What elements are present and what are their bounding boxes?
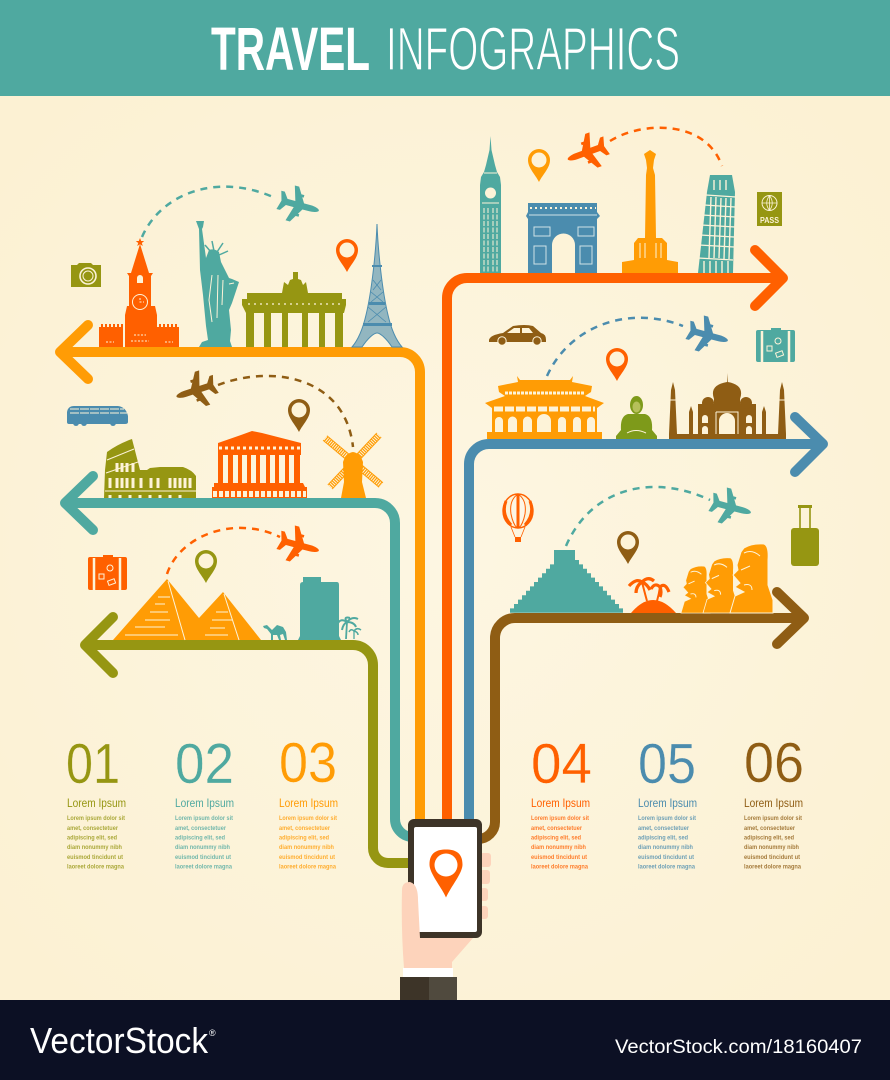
column 04 xyxy=(531,732,592,870)
column 01: adipiscing elit, sed xyxy=(67,834,117,842)
column 03: diam nonummy nibh xyxy=(279,844,334,851)
icon: palm trees xyxy=(338,618,361,639)
icon: map pin olive xyxy=(195,550,217,583)
column 05: Lorem ipsum dolor sit xyxy=(638,815,697,822)
icon: camera xyxy=(71,263,101,287)
landmark: modern building xyxy=(298,577,341,640)
column 06 xyxy=(744,731,804,870)
column 01: amet, consectetuer xyxy=(67,825,118,832)
column 03: amet, consectetuer xyxy=(279,825,330,832)
column 05: Lorem Ipsum xyxy=(638,798,697,810)
column 06: Lorem Ipsum xyxy=(744,798,803,810)
route line 3: olive arrow left xyxy=(85,617,420,863)
landmark: Mayan pyramid xyxy=(510,550,623,613)
landmark: Victory Column xyxy=(622,150,678,273)
column 03: euismod tincidunt ut xyxy=(279,854,336,861)
column 04: 04 xyxy=(531,732,592,796)
column 04: adipiscing elit, sed xyxy=(531,834,581,842)
landmark: Easter Island moai xyxy=(681,544,773,613)
smartphone xyxy=(408,819,482,938)
footer url: VectorStock.com/18160407 xyxy=(615,1037,862,1058)
shirt cuff xyxy=(403,968,453,977)
landmark: Leaning Tower of Pisa xyxy=(698,175,736,273)
moai head large xyxy=(730,544,773,613)
palm and thumb xyxy=(402,882,473,968)
column 02: Lorem Ipsum xyxy=(175,798,234,810)
fingers xyxy=(480,853,491,919)
icon: map pin red 2 xyxy=(606,348,628,381)
flight path red-orange xyxy=(167,528,280,574)
column 01: euismod tincidunt ut xyxy=(67,854,124,861)
column 02 xyxy=(175,732,234,870)
icon: passport xyxy=(757,192,782,226)
icon: map pin brown 2 xyxy=(617,531,639,564)
flight path blue xyxy=(547,318,683,376)
title light word: INFOGRAPHICS xyxy=(386,15,680,83)
landmark: Chinese palace xyxy=(485,376,604,439)
column 04: euismod tincidunt ut xyxy=(531,854,588,861)
column 02: diam nonummy nibh xyxy=(175,844,230,851)
icon: bus xyxy=(67,406,128,426)
column 06: euismod tincidunt ut xyxy=(744,854,801,861)
column 01: laoreet dolore magna xyxy=(67,864,124,870)
icon: plane teal xyxy=(274,182,324,228)
icon: map pin brown xyxy=(288,399,310,432)
route line 4: red-orange arrow right xyxy=(447,250,783,825)
moai head small xyxy=(681,566,710,613)
column 01: Lorem ipsum dolor sit xyxy=(67,815,126,822)
footer watermark bar xyxy=(0,1000,890,1080)
column 03 xyxy=(279,731,338,870)
column 03: laoreet dolore magna xyxy=(279,864,336,870)
icon: map pin orange xyxy=(528,149,550,182)
landmark: tropical island xyxy=(629,579,676,613)
column 04: laoreet dolore magna xyxy=(531,864,588,870)
column 02: Lorem ipsum dolor sit xyxy=(175,815,234,822)
landmark: Arc de Triomphe xyxy=(526,203,600,273)
column 05: diam nonummy nibh xyxy=(638,844,693,851)
column 05: amet, consectetuer xyxy=(638,825,689,832)
icon: teal suitcase xyxy=(756,328,795,362)
column 04: Lorem Ipsum xyxy=(531,798,590,810)
title bold word: TRAVEL xyxy=(211,15,370,83)
icon: plane orange xyxy=(274,522,324,568)
icon: trolley luggage xyxy=(791,505,819,566)
column 01: 01 xyxy=(66,732,120,796)
landmark: Eiffel Tower xyxy=(352,224,402,347)
icon: plane brown xyxy=(171,367,221,414)
flight path orange xyxy=(610,128,722,166)
registered mark: ® xyxy=(209,1028,216,1038)
icon: red suitcase xyxy=(88,555,127,590)
column 01 xyxy=(66,732,126,870)
landmark: pyramids xyxy=(113,579,261,640)
icon: map pin red xyxy=(336,239,358,272)
column 01: Lorem Ipsum xyxy=(67,798,126,810)
column 06: adipiscing elit, sed xyxy=(744,834,794,842)
icon: plane blue xyxy=(683,312,733,358)
column 02: euismod tincidunt ut xyxy=(175,854,232,861)
column 02: adipiscing elit, sed xyxy=(175,834,225,842)
header banner xyxy=(0,0,890,96)
column 05 xyxy=(638,732,697,870)
column 03: Lorem ipsum dolor sit xyxy=(279,815,338,822)
column 05: euismod tincidunt ut xyxy=(638,854,695,861)
landmark: Colosseum xyxy=(104,439,196,498)
column 02: laoreet dolore magna xyxy=(175,864,232,870)
column 06: Lorem ipsum dolor sit xyxy=(744,815,803,822)
column 02: 02 xyxy=(175,732,234,796)
landmark: Kremlin tower xyxy=(99,238,179,347)
icon: camel xyxy=(263,625,287,640)
flight path teal xyxy=(142,187,273,237)
column 06: laoreet dolore magna xyxy=(744,864,801,870)
footer logo: VectorStock xyxy=(30,1020,209,1061)
landmark: Brandenburg Gate xyxy=(242,272,346,347)
column 06: 06 xyxy=(744,731,804,795)
moai head medium xyxy=(703,558,737,613)
jacket sleeve xyxy=(400,977,457,1000)
column 04: amet, consectetuer xyxy=(531,825,582,832)
flight path teal 2 xyxy=(566,487,710,546)
landmark: Taj Mahal xyxy=(669,373,786,439)
landmark: Big Ben xyxy=(480,136,501,273)
flight path brown xyxy=(218,376,353,447)
landmark: Buddha statue xyxy=(616,396,657,439)
icon: plane teal 2 xyxy=(706,484,756,530)
column 02: amet, consectetuer xyxy=(175,825,226,832)
icon: hot air balloon xyxy=(503,494,533,542)
column 03: 03 xyxy=(279,731,337,795)
icon: passport: PASS xyxy=(760,216,780,225)
column 01: diam nonummy nibh xyxy=(67,844,122,851)
icon: car xyxy=(489,325,546,345)
column 06: amet, consectetuer xyxy=(744,825,795,832)
icon: plane red-orange xyxy=(562,128,613,176)
landmark: Statue of Liberty xyxy=(196,221,239,347)
column 03: Lorem Ipsum xyxy=(279,798,338,810)
route line 5: blue arrow right xyxy=(469,417,823,825)
route line 6: brown arrow right xyxy=(470,592,804,839)
hand holding phone xyxy=(400,819,491,1000)
column 05: 05 xyxy=(638,732,696,796)
column 04: Lorem ipsum dolor sit xyxy=(531,815,590,822)
route line 1: orange arrow left xyxy=(60,325,420,825)
landmark: windmill xyxy=(325,435,381,498)
column 05: adipiscing elit, sed xyxy=(638,834,688,842)
landmark: Parthenon xyxy=(212,431,307,498)
column 05: laoreet dolore magna xyxy=(638,864,695,870)
route line 2: teal arrow left xyxy=(65,476,420,837)
column 03: adipiscing elit, sed xyxy=(279,834,329,842)
column 04: diam nonummy nibh xyxy=(531,844,586,851)
column 06: diam nonummy nibh xyxy=(744,844,799,851)
